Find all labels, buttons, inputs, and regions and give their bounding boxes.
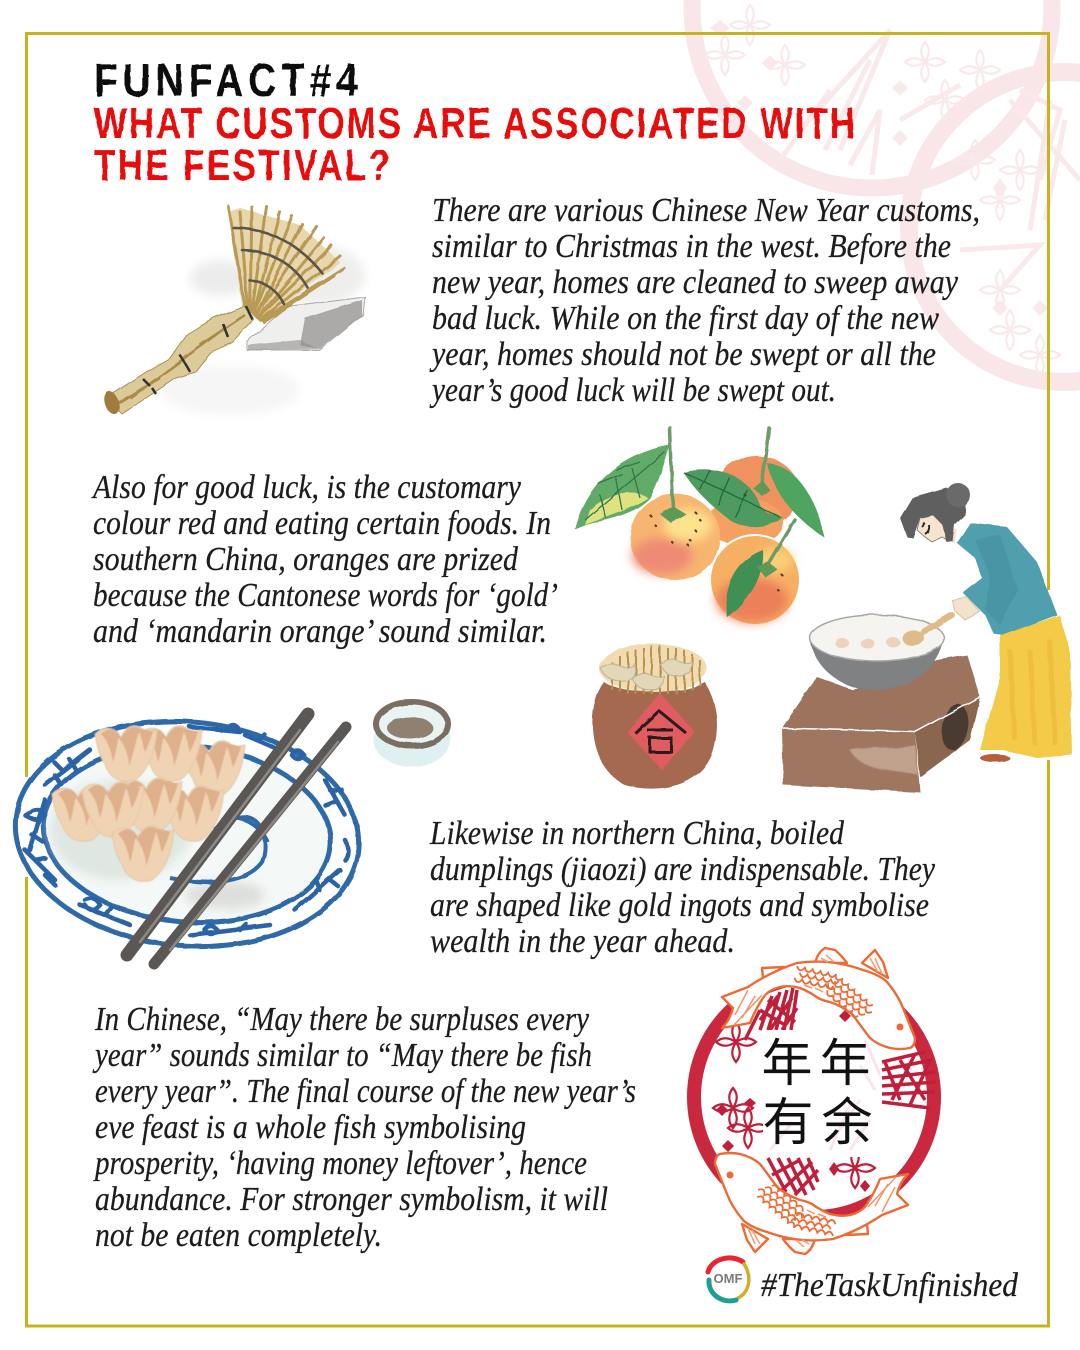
chinese characters: 年 <box>761 1035 813 1092</box>
text block: sweeping customs: year, homes should not be swept or all the <box>429 336 936 373</box>
text block: fish symbolism <box>92 1001 636 1254</box>
text block: fish symbolism: In Chinese, “May there be surpluses every <box>94 1001 590 1038</box>
text block: red and oranges: and ‘mandarin orange’ sound similar. <box>93 613 547 650</box>
text block: fish symbolism: year” sounds similar to “May there be fish <box>92 1037 592 1074</box>
chinese characters: 余 <box>821 1094 873 1151</box>
text block: dumplings: are shaped like gold ingots and symbolise <box>430 887 929 924</box>
watermark: paper-cut fish circles <box>692 0 1080 382</box>
icon: stove with pot <box>782 615 980 792</box>
text block: fish symbolism: every year”. The final course of the new year’s <box>95 1073 636 1110</box>
fish bottom <box>715 1153 908 1254</box>
heading: fun fact number: FUNFACT#4 <box>94 55 358 107</box>
icon: plate of dumplings with chopsticks <box>6 707 368 964</box>
fish top <box>722 948 915 1049</box>
text block: sweeping customs <box>429 192 980 409</box>
text block: red and oranges: Also for good luck, is the customary <box>91 469 522 506</box>
icon: mandarin oranges <box>575 428 825 625</box>
footer: logo and hashtag <box>708 1258 1019 1304</box>
plate <box>6 707 368 961</box>
red ring <box>694 977 934 1217</box>
text block: dumplings: Likewise in northern China, boiled <box>429 815 845 852</box>
heading: question: THE FESTIVAL? <box>94 141 390 190</box>
text block: red and oranges: colour red and eating certain foods. In <box>93 505 551 542</box>
text block: fish symbolism: not be eaten completely. <box>95 1217 382 1254</box>
text block: fish symbolism: abundance. For stronger symbolism, it will <box>95 1181 608 1218</box>
title block <box>94 55 855 190</box>
hashtag: #TheTaskUnfinished <box>761 1267 1019 1304</box>
text block: sweeping customs: year’s good luck will be swept out. <box>429 372 836 409</box>
icon: OMF logo <box>708 1258 749 1301</box>
white gap in right frame behind figure <box>1043 590 1053 760</box>
white gap in left frame behind plate <box>22 777 31 877</box>
text block: sweeping customs: bad luck. While on the first day of the new <box>432 300 939 337</box>
icon: OMF logo: OMF <box>714 1271 742 1286</box>
chopsticks <box>127 714 346 964</box>
text block: sweeping customs: similar to Christmas in the west. Before the <box>432 228 951 265</box>
text block: fish symbolism: prosperity, ‘having money leftover’, hence <box>93 1145 587 1182</box>
text block: red and oranges <box>91 469 558 650</box>
icon: jar of dumplings <box>592 644 717 789</box>
text block: dumplings: dumplings (jiaozi) are indispensable. They <box>430 851 936 888</box>
icon: koi fish emblem <box>694 948 936 1254</box>
red paper-cut patterns <box>713 988 936 1195</box>
chinese characters <box>761 1035 873 1151</box>
chinese characters: 有 <box>762 1094 814 1151</box>
dumplings <box>52 726 245 881</box>
heading: question: WHAT CUSTOMS ARE ASSOCIATED WITH <box>94 99 855 148</box>
icon: broom and dustpan <box>101 206 365 417</box>
heading: question <box>94 99 855 190</box>
text block: red and oranges: southern China, oranges are prized <box>93 541 519 578</box>
text block: dumplings: wealth in the year ahead. <box>430 923 735 960</box>
icon: sauce dish <box>373 702 451 767</box>
chinese characters: 年 <box>819 1035 871 1092</box>
central white panel <box>763 1030 881 1157</box>
text block: dumplings <box>429 815 936 960</box>
text block: sweeping customs: There are various Chinese New Year customs, <box>432 192 980 229</box>
text block: fish symbolism: eve feast is a whole fish symbolising <box>95 1109 526 1146</box>
icon: woman cooking <box>900 483 1072 762</box>
text block: sweeping customs: new year, homes are cleaned to sweep away <box>432 264 959 301</box>
text block: red and oranges: because the Cantonese words for ‘gold’ <box>93 577 558 614</box>
